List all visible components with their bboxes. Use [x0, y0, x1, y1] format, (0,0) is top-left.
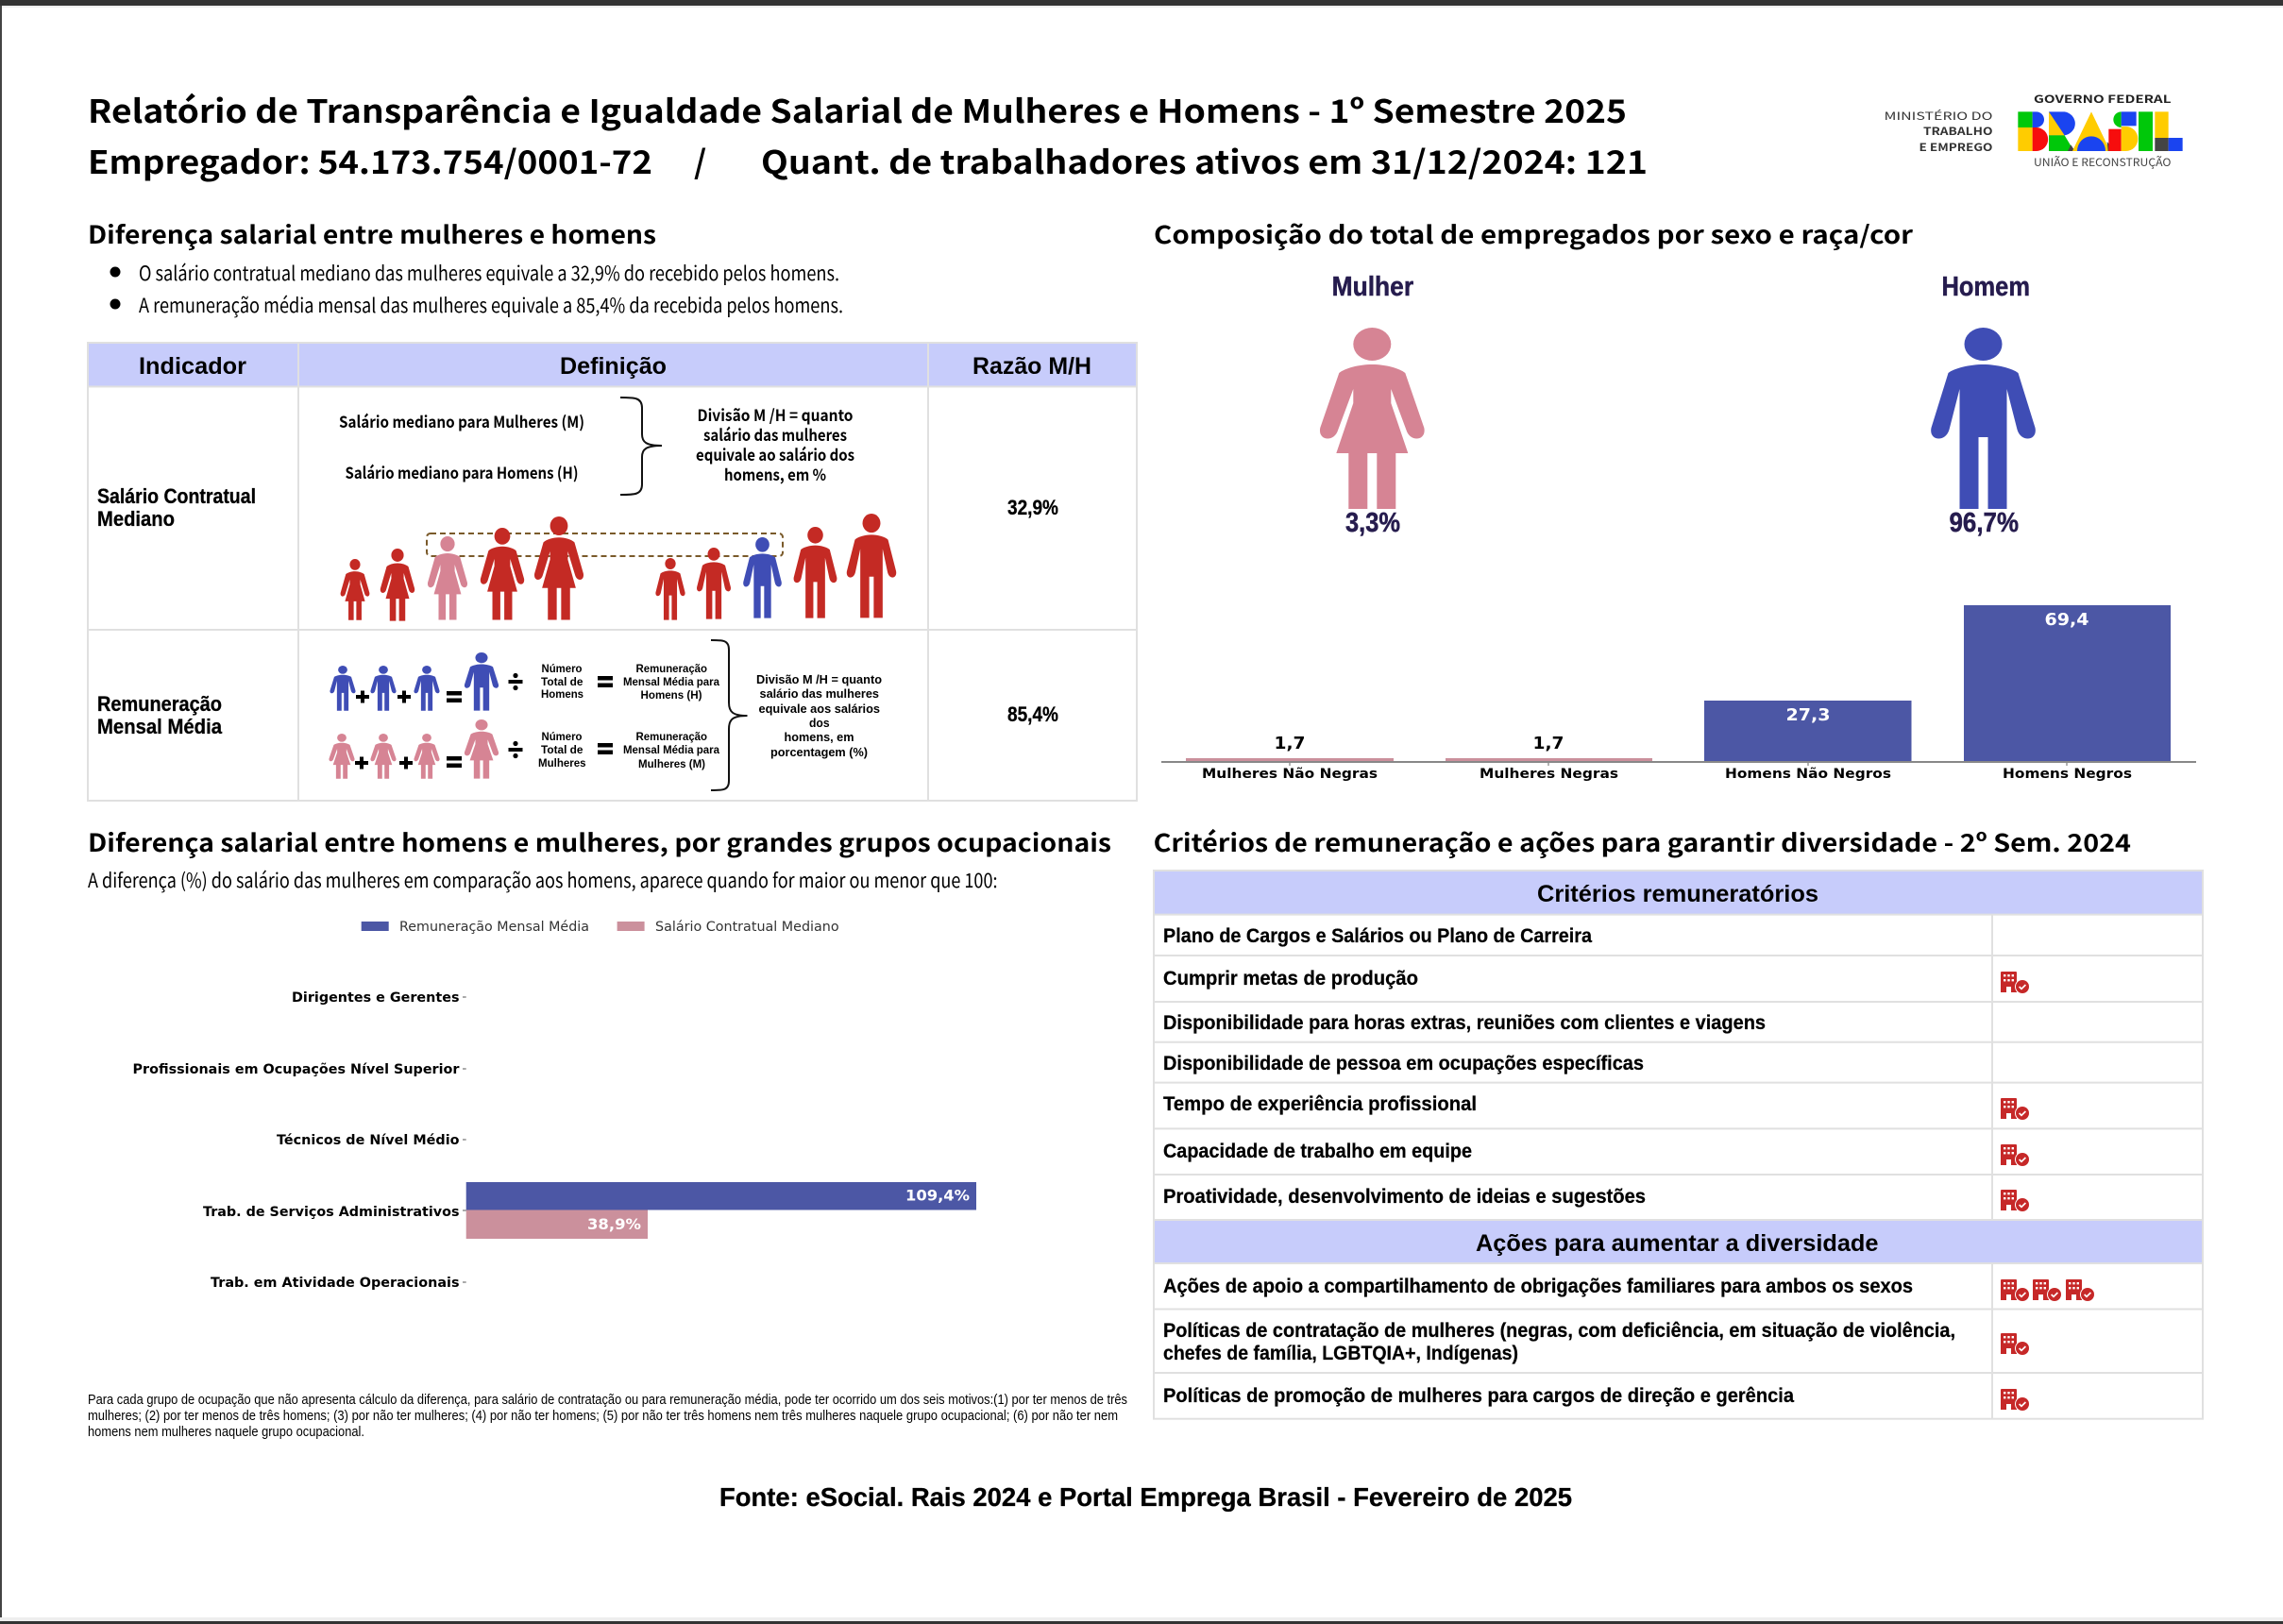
criteria rows	[1163, 924, 1766, 1208]
title	[88, 86, 1648, 183]
bar chart: grupos ocupacionais: Dirigentes e Gerentes	[292, 990, 459, 1006]
bar chart: composição por raça/cor: 69,4	[2045, 610, 2089, 630]
source line: Fonte: eSocial. Rais 2024 e Portal Emprega Brasil - Fevereiro de 2025	[719, 1482, 1572, 1512]
bar chart: composição por raça/cor: Mulheres Não Negras	[1202, 767, 1378, 782]
formula: women	[329, 719, 719, 779]
bar chart: composição por raça/cor: 27,3	[1786, 705, 1830, 725]
logo: governo federal brasil: UNIÃO E RECONSTRUÇÃO	[2034, 155, 2172, 170]
action rows: Políticas de promoção de mulheres para cargos de direção e gerência	[1163, 1384, 1795, 1407]
bar chart: composição por raça/cor: 1,7	[1533, 734, 1564, 753]
formula: women: Remuneração	[636, 730, 707, 743]
table header	[88, 343, 1137, 386]
action rows	[1163, 1275, 1955, 1407]
table header: Indicador	[139, 353, 246, 380]
footnote: homens nem mulheres naquele grupo ocupacional.	[88, 1424, 364, 1440]
explanation: divisão M/H percent: dos	[809, 717, 830, 730]
people ordered by salary: men	[655, 514, 896, 620]
brace: remuneração	[711, 640, 748, 790]
section header: critérios remuneratórios: Critérios remuneratórios	[1537, 881, 1818, 907]
formula: men: Total de	[541, 675, 583, 688]
pictogram: homem 96,7%: 96,7%	[1949, 508, 2019, 538]
definition text: salário mediano	[339, 409, 584, 483]
criteria rows: Capacidade de trabalho em equipe	[1163, 1140, 1472, 1162]
bar chart: grupos ocupacionais: Trab. de Serviços Administrativos	[203, 1205, 459, 1220]
legend	[362, 920, 839, 935]
explanation: divisão M/H: salário das mulheres	[703, 422, 847, 446]
table header: Definição	[560, 353, 667, 380]
explanation: divisão M/H percent: porcentagem (%)	[770, 746, 868, 759]
logo: governo federal brasil: TRABALHO	[1923, 124, 1993, 139]
formula: men: Número	[542, 662, 582, 675]
criteria rows: Tempo de experiência profissional	[1163, 1092, 1477, 1115]
icons: company check marks	[2001, 972, 2095, 1412]
footnote: Para cada grupo de ocupação que não apresenta cálculo da diferença, para salário de contratação ou para remuneração média, pode ter ocorrido um dos seis motivos:(1) por ter menos de três	[88, 1392, 1127, 1408]
formula: men: Homens (H)	[640, 688, 702, 702]
bullet list: A remuneração média mensal das mulheres equivale a 85,4% da recebida pelos homens.	[139, 291, 843, 319]
formula: women: Mulheres (M)	[638, 757, 705, 770]
bar chart: grupos ocupacionais: Trab. em Atividade Operacionais	[211, 1276, 459, 1291]
row label: salário contratual mediano: Salário Contratual	[97, 484, 256, 508]
formula: men: Mensal Média para	[623, 675, 719, 688]
bar chart: composição por raça/cor: Mulheres Negras	[1480, 767, 1618, 782]
bar chart: grupos ocupacionais: 109,4%	[905, 1186, 970, 1205]
criteria rows: Disponibilidade para horas extras, reuniões com clientes e viagens	[1163, 1011, 1766, 1034]
bullet list: O salário contratual mediano das mulheres equivale a 32,9% do recebido pelos homens.	[139, 259, 839, 287]
legend: Salário Contratual Mediano	[655, 920, 839, 935]
formula: men: Homens	[541, 687, 583, 701]
action rows: Políticas de contratação de mulheres (negras, com deficiência, em situação de violência,	[1163, 1319, 1955, 1342]
bar chart: composição por raça/cor: 1,7	[1275, 734, 1305, 753]
row label: remuneração mensal média: Remuneração	[97, 692, 222, 716]
formula: men	[330, 652, 719, 711]
definition text: salário mediano: Salário mediano para Mulheres (M)	[339, 409, 584, 432]
formula: women: Número	[542, 730, 582, 743]
bar chart: composição por raça/cor: Homens Não Negros	[1725, 767, 1891, 782]
pictogram: homem 96,7%: Homem	[1941, 272, 2030, 302]
value: 32,9%: 32,9%	[1007, 496, 1058, 519]
footnote	[88, 1392, 1127, 1440]
row label: salário contratual mediano: Mediano	[97, 507, 175, 531]
bar chart: grupos ocupacionais: Profissionais em Ocupações Nível Superior	[132, 1062, 460, 1077]
criteria rows: Proatividade, desenvolvimento de ideias e sugestões	[1163, 1185, 1646, 1208]
pictogram: mulher 3,3%	[1320, 272, 1425, 538]
row label: remuneração mensal média: Mensal Média	[97, 715, 222, 738]
table header: Razão M/H	[972, 353, 1091, 380]
subtitle: grupos ocupacionais: A diferença (%) do salário das mulheres em comparação aos homens, aparece quando for maior ou menor que 100:	[88, 866, 997, 894]
criteria rows: Cumprir metas de produção	[1163, 967, 1418, 990]
explanation: divisão M/H percent: Divisão M /H = quanto	[756, 673, 882, 686]
title: Relatório de Transparência e Igualdade Salarial de Mulheres e Homens - 1º Semestre 2025	[88, 86, 1627, 132]
bar chart: grupos ocupacionais: Técnicos de Nível Médio	[277, 1133, 460, 1148]
criteria rows: Disponibilidade de pessoa em ocupações específicas	[1163, 1052, 1644, 1074]
bar chart: grupos ocupacionais	[132, 990, 976, 1291]
section header: ações: Ações para aumentar a diversidade	[1476, 1230, 1879, 1257]
row label: remuneração mensal média	[97, 692, 222, 738]
explanation: divisão M/H percent: equivale aos salários	[759, 702, 880, 716]
formula: women: Mensal Média para	[623, 743, 719, 756]
value: 85,4%: 85,4%	[1007, 702, 1058, 726]
bar chart: composição por raça/cor: Homens Negros	[2003, 767, 2132, 782]
footnote: mulheres; (2) por ter menos de três homens; (3) por não ter mulheres; (4) por não ter homens; (5) por não ter três homens nem três mulheres naquele grupo ocupacional; (6) por não ter nem	[88, 1408, 1118, 1424]
criteria rows: Plano de Cargos e Salários ou Plano de Carreira	[1163, 924, 1593, 947]
pictogram: homem 96,7%	[1931, 272, 2036, 538]
panel: indicator table	[88, 343, 1137, 801]
formula: women: Total de	[541, 743, 583, 756]
formula: men: Remuneração	[636, 662, 707, 675]
title: Empregador: 54.173.754/0001-72	[88, 137, 652, 183]
action rows: Ações de apoio a compartilhamento de obrigações familiares para ambos os sexos	[1163, 1275, 1913, 1297]
pictogram: mulher 3,3%: Mulher	[1332, 272, 1413, 302]
explanation: divisão M/H: homens, em %	[724, 462, 826, 485]
bullet list	[110, 259, 843, 319]
explanation: divisão M/H percent: salário das mulheres	[759, 687, 879, 701]
explanation: divisão M/H percent	[756, 673, 882, 759]
explanation: divisão M/H: Divisão M /H = quanto	[697, 402, 854, 426]
formula: women: Mulheres	[538, 756, 586, 770]
explanation: divisão M/H	[696, 402, 854, 485]
definition text: salário mediano: Salário mediano para Homens (H)	[346, 460, 578, 483]
brace: salário mediano	[620, 398, 662, 495]
heading: grupos ocupacionais: Diferença salarial entre homens e mulheres, por grandes grupos ocupacionais	[88, 824, 1111, 859]
bar chart: composição por raça/cor	[1161, 605, 2196, 782]
logo: governo federal brasil	[1885, 92, 2183, 170]
heading: diferença salarial: Diferença salarial entre mulheres e homens	[88, 216, 656, 251]
bar chart: grupos ocupacionais: 38,9%	[587, 1215, 641, 1233]
logo: governo federal brasil: GOVERNO FEDERAL	[2034, 92, 2172, 107]
pictogram: mulher 3,3%: 3,3%	[1345, 508, 1400, 538]
heading: composição: Composição do total de empregados por sexo e raça/cor	[1154, 216, 1914, 251]
explanation: divisão M/H: equivale ao salário dos	[696, 442, 854, 465]
heading: critérios: Critérios de remuneração e ações para garantir diversidade - 2º Sem. 2024	[1154, 824, 2131, 859]
logo: governo federal brasil: E EMPREGO	[1919, 140, 1993, 155]
logo: governo federal brasil: MINISTÉRIO DO	[1885, 109, 1992, 124]
legend: Remuneração Mensal Média	[399, 920, 589, 935]
action rows: chefes de família, LGBTQIA+, Indígenas)	[1163, 1342, 1518, 1364]
title: /	[694, 137, 706, 183]
people ordered by salary: women	[341, 516, 583, 621]
dashed median highlight	[427, 533, 783, 556]
row label: salário contratual mediano	[97, 484, 256, 531]
explanation: divisão M/H percent: homens, em	[784, 731, 854, 744]
title: Quant. de trabalhadores ativos em 31/12/2024: 121	[761, 137, 1648, 183]
panel: criteria table	[1154, 871, 2203, 1419]
